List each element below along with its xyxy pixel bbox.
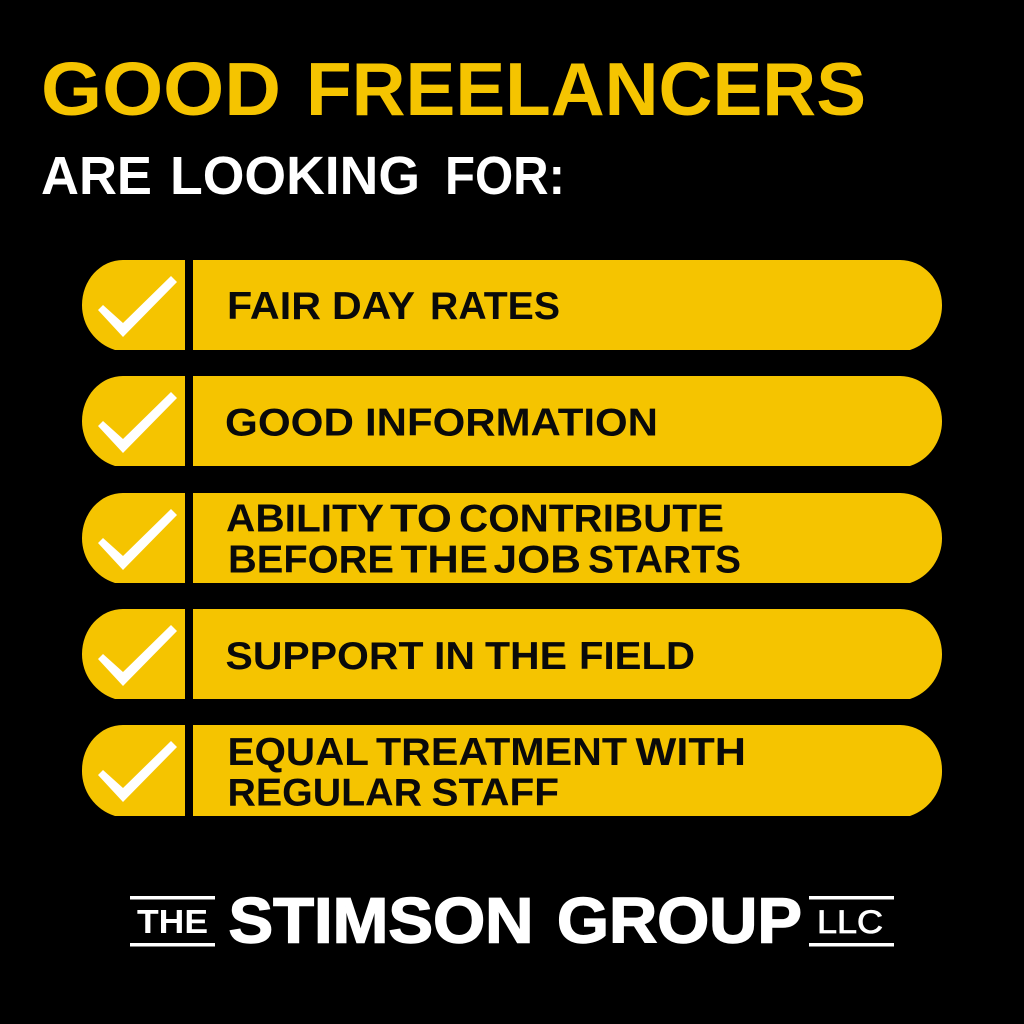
label: CONTRIBUTE — [459, 498, 724, 541]
icon: check mark — [98, 741, 177, 802]
label: TREATMENT — [376, 731, 628, 774]
label — [227, 285, 560, 328]
label: FIELD — [579, 635, 695, 678]
logo: the stimson group llc: GROUP — [557, 884, 802, 956]
label: INFORMATION — [365, 402, 658, 444]
icon: check mark — [98, 392, 177, 453]
logo: the stimson group llc: STIMSON — [228, 884, 534, 956]
label — [228, 731, 746, 815]
title — [41, 47, 866, 131]
item: equal treatment — [82, 725, 942, 816]
label: TO — [390, 498, 452, 541]
label — [226, 498, 741, 581]
title: FREELANCERS — [306, 47, 866, 131]
label: IN — [434, 635, 475, 678]
label: JOB — [494, 538, 581, 581]
label: FAIR — [227, 285, 321, 328]
label: BEFORE — [228, 538, 394, 581]
label: REGULAR — [228, 772, 422, 815]
label — [225, 402, 658, 444]
item: support in the field — [82, 609, 942, 699]
icon: check mark — [98, 625, 177, 686]
logo: the stimson group llc: LLC — [817, 904, 883, 940]
label: THE — [485, 635, 567, 678]
item: good information — [82, 376, 942, 466]
title: GOOD — [41, 47, 281, 131]
label: STARTS — [588, 538, 741, 581]
item: fair day rates — [82, 260, 942, 350]
label: GOOD — [225, 402, 354, 444]
logo: the stimson group llc: THE — [137, 903, 208, 940]
item: ability to contribute — [82, 493, 942, 583]
subtitle — [41, 146, 565, 206]
label: EQUAL — [228, 731, 369, 774]
icon: check mark — [98, 509, 177, 570]
subtitle: ARE — [41, 146, 152, 206]
logo: the stimson group llc — [130, 884, 894, 956]
subtitle: FOR: — [445, 146, 565, 206]
icon: check mark — [98, 276, 177, 337]
subtitle: LOOKING — [170, 146, 420, 206]
label — [226, 635, 695, 678]
label: RATES — [430, 285, 560, 328]
label: SUPPORT — [226, 635, 424, 678]
label: DAY — [332, 285, 415, 328]
label: WITH — [636, 731, 746, 774]
label: STAFF — [432, 772, 559, 815]
label: THE — [400, 538, 488, 581]
label: ABILITY — [226, 498, 384, 541]
